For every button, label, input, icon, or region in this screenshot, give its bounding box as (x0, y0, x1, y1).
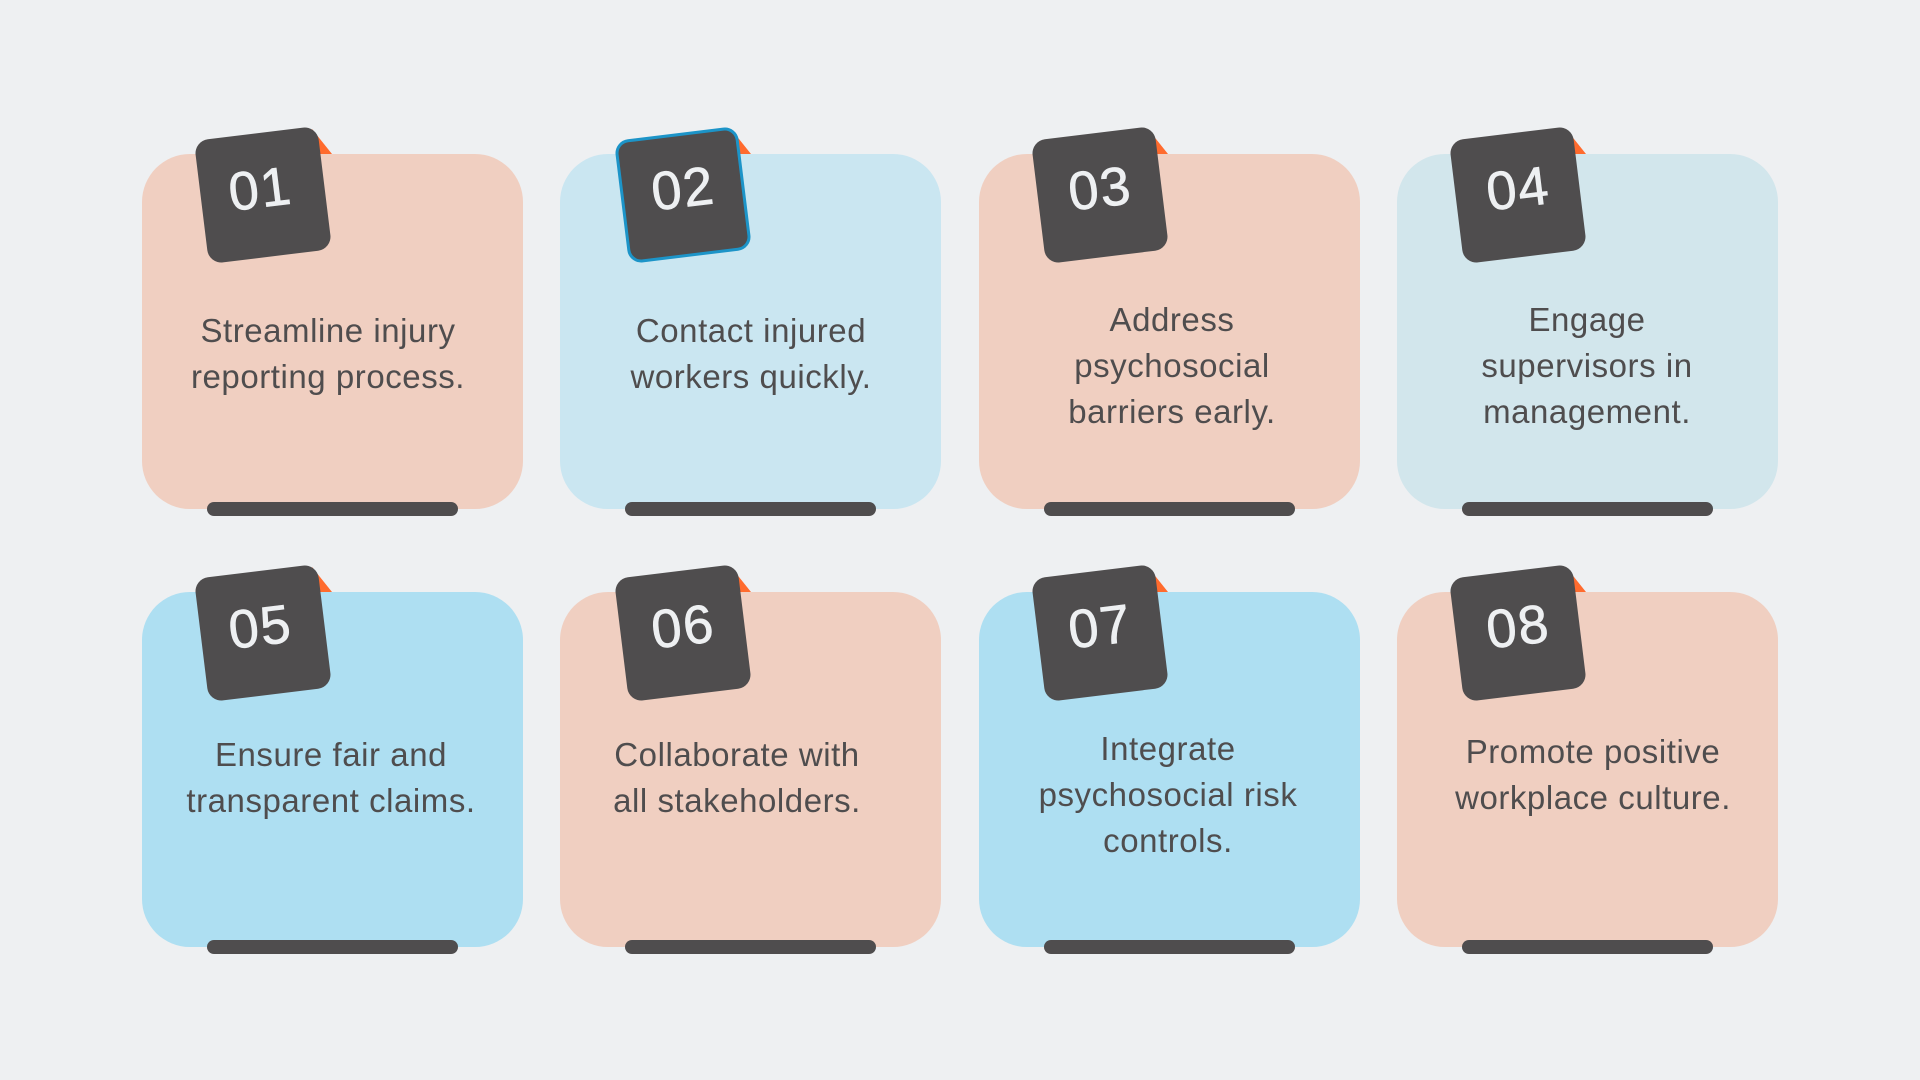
text 02 (630, 312, 872, 395)
number badge 01 (194, 126, 332, 264)
fold corner 01 (312, 129, 332, 154)
text 06: Collaborate with (614, 736, 860, 773)
number badge 07: 07 (1065, 593, 1135, 661)
text 04 (1481, 301, 1693, 430)
number badge 08: 08 (1483, 593, 1553, 661)
number badge 04 (1449, 126, 1587, 264)
bottom bar 07 (1044, 940, 1295, 954)
fold corner 06 (731, 567, 751, 592)
text 06: all stakeholders. (613, 782, 861, 819)
bottom bar 02 (625, 502, 876, 516)
panel 01 (142, 154, 523, 509)
fold corner 04 (1566, 129, 1586, 154)
text 04: Engage (1528, 301, 1646, 338)
fold corner 03 (1148, 129, 1168, 154)
text 08 (1455, 733, 1731, 816)
text 08: workplace culture. (1455, 779, 1731, 816)
card 02 (560, 128, 941, 516)
text 01: reporting process. (191, 358, 465, 395)
panel 06 (560, 592, 941, 947)
card 05 (142, 566, 523, 954)
card 03 (979, 128, 1360, 516)
text 07: controls. (1103, 822, 1233, 859)
number badge 06 (614, 564, 752, 702)
text 08: Promote positive (1466, 733, 1720, 770)
number badge 03: 03 (1065, 155, 1135, 223)
text 06 (613, 736, 861, 819)
panel 02 (560, 154, 941, 509)
bottom bar 01 (207, 502, 458, 516)
text 02: Contact injured (636, 312, 866, 349)
text 03: psychosocial (1074, 347, 1270, 384)
panel 08 (1397, 592, 1778, 947)
text 07 (1039, 730, 1297, 859)
text 02: workers quickly. (630, 358, 872, 395)
number badge 06: 06 (648, 593, 718, 661)
number badge 05 (194, 564, 332, 702)
text 03 (1068, 301, 1276, 430)
text 03: barriers early. (1068, 393, 1276, 430)
number badge 02: 02 (648, 155, 718, 223)
text 04: management. (1483, 393, 1691, 430)
number badge 03 (1031, 126, 1169, 264)
fold corner 08 (1566, 567, 1586, 592)
number badge 01: 01 (225, 156, 295, 223)
bottom bar 05 (207, 940, 458, 954)
text 04: supervisors in (1481, 347, 1693, 384)
fold corner 07 (1148, 567, 1168, 592)
bottom bar 08 (1462, 940, 1713, 954)
card 08 (1397, 566, 1778, 954)
number badge 07 (1031, 564, 1169, 702)
panel 03 (979, 154, 1360, 509)
card 06 (560, 566, 941, 954)
number badge 02 (614, 126, 752, 264)
bottom bar 03 (1044, 502, 1295, 516)
card 01 (142, 128, 523, 516)
number badge 04: 04 (1483, 155, 1553, 223)
card 04 (1397, 128, 1778, 516)
panel 05 (142, 592, 523, 947)
fold corner 02 (738, 138, 751, 154)
text 03: Address (1110, 301, 1234, 338)
text 05 (186, 736, 476, 819)
number badge 05: 05 (225, 594, 295, 661)
text 05: Ensure fair and (215, 736, 447, 773)
bottom bar 04 (1462, 502, 1713, 516)
card 07 (979, 566, 1360, 954)
text 05: transparent claims. (186, 782, 476, 819)
text 07: Integrate (1100, 730, 1236, 767)
text 01: Streamline injury (200, 312, 456, 349)
panel 07 (979, 592, 1360, 947)
text 07: psychosocial risk (1039, 776, 1297, 813)
bottom bar 06 (625, 940, 876, 954)
panel 04 (1397, 154, 1778, 509)
number badge 08 (1449, 564, 1587, 702)
text 01 (191, 312, 465, 395)
fold corner 05 (312, 567, 332, 592)
